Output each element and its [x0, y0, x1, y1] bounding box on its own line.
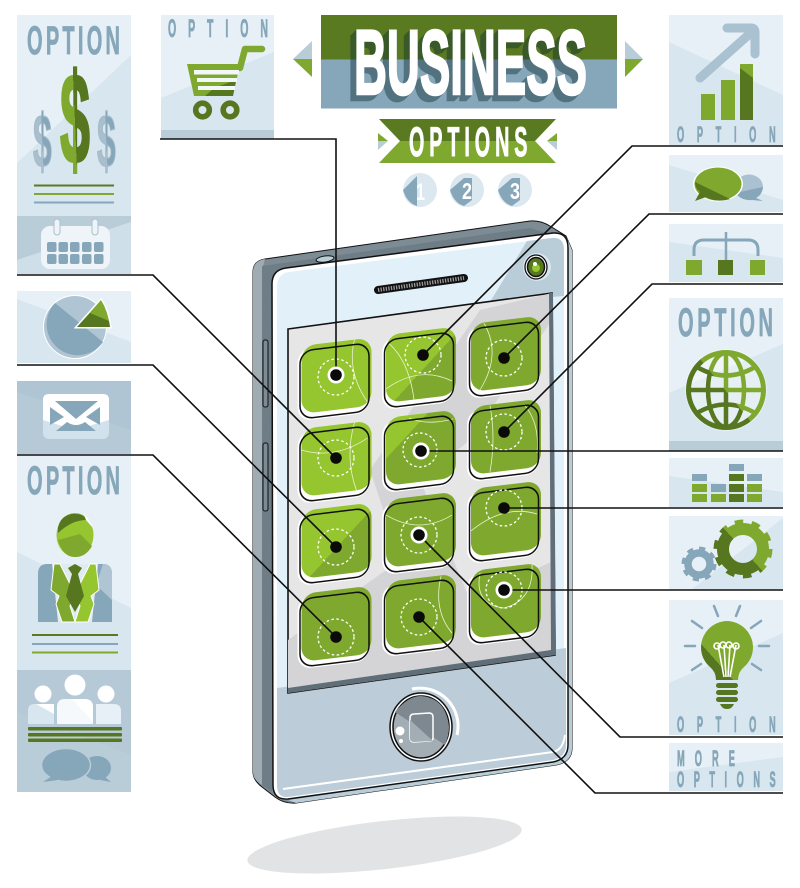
leader: hierarchy	[504, 284, 783, 432]
icon: equalizer	[692, 464, 762, 502]
panel: person	[17, 454, 131, 670]
camera	[523, 253, 551, 281]
subtitle: options ribbon: OPTIONS	[409, 118, 527, 165]
app tiles	[298, 316, 541, 669]
icon: light bulb	[685, 606, 769, 709]
icon: dollar signs: $	[97, 100, 116, 184]
leader lines	[17, 139, 783, 793]
tile dashed rings	[318, 337, 522, 655]
panel: idea bulb	[669, 600, 783, 737]
number 2: 2	[462, 178, 472, 204]
icon: speech bubbles	[693, 166, 763, 202]
icon: speech bubbles	[42, 748, 111, 782]
text lines	[32, 634, 118, 654]
leader: calendar	[17, 275, 336, 458]
screen	[288, 293, 556, 693]
tile row 3 col 1	[298, 503, 372, 586]
tile row 4 col 2	[382, 574, 456, 657]
icon: growth arrow and bars	[700, 28, 755, 120]
home button	[390, 688, 458, 761]
icon: org chart	[686, 232, 765, 275]
leader: chat	[504, 214, 783, 358]
step numbers	[403, 173, 532, 207]
icon: envelope	[43, 394, 109, 439]
leader: cart	[160, 139, 336, 375]
leader: mail	[17, 455, 336, 637]
leader: bulb	[419, 535, 783, 737]
label: option: OPTION	[677, 122, 776, 147]
speaker	[378, 278, 464, 290]
number 3: 3	[510, 178, 520, 204]
leader: more options	[419, 617, 783, 793]
icon: pie chart	[43, 295, 110, 359]
panel: globe	[669, 298, 783, 451]
arrow: left of title	[293, 41, 312, 77]
tile row 1 col 2	[382, 327, 456, 410]
label: option: OPTION	[168, 16, 268, 44]
panel: cart	[161, 15, 274, 139]
icon: shopping cart	[187, 49, 262, 117]
panel: money	[17, 15, 131, 216]
panel: gears	[669, 516, 783, 590]
subtitle: options ribbon	[378, 118, 557, 165]
leader: equalizer	[504, 507, 783, 509]
icon: calendar	[41, 219, 110, 269]
tile row 2 col 1	[298, 421, 372, 504]
arrow: right of title	[625, 41, 643, 77]
leader: globe	[421, 450, 783, 452]
tile row 3 col 3	[467, 481, 541, 564]
panel: chat	[669, 155, 783, 212]
panel: equalizer	[669, 458, 783, 507]
panel: mail	[17, 381, 131, 454]
icon: globe	[685, 349, 767, 431]
icon: team of people	[28, 674, 122, 742]
tile row 2 col 2	[382, 410, 456, 493]
title: business banner	[321, 12, 617, 114]
icon: gears	[684, 523, 769, 579]
panel: hierarchy	[669, 224, 783, 282]
ground shadow	[245, 806, 524, 884]
tile row 2 col 3	[467, 399, 541, 482]
leader: gears	[504, 589, 783, 591]
label: option: OPTION	[678, 299, 773, 345]
panel: calendar	[17, 216, 131, 274]
panel: growth chart	[669, 15, 783, 147]
text lines	[34, 184, 114, 204]
icon: dollar signs: $	[60, 47, 90, 190]
label: options: OPTIONS	[677, 767, 776, 792]
leader: growth chart	[423, 146, 783, 355]
icon: dollar signs: $	[33, 100, 52, 184]
panel: more options	[669, 743, 783, 792]
tile row 3 col 2	[382, 492, 456, 575]
label: option: OPTION	[27, 17, 120, 63]
label: option: OPTION	[27, 457, 120, 503]
phone front	[272, 233, 568, 799]
tile row 4 col 3	[467, 563, 541, 646]
label: option: OPTION	[677, 712, 776, 737]
phone	[253, 221, 572, 803]
connector dots	[328, 349, 512, 643]
panel: pie chart	[17, 291, 131, 363]
leader: pie chart	[17, 365, 336, 547]
phone back and side	[253, 221, 572, 803]
panel: team	[17, 670, 131, 792]
label: more: MORE	[677, 746, 735, 771]
number 1: 1	[416, 179, 425, 206]
tile row 1 col 3	[467, 316, 541, 399]
icon: businessman	[38, 513, 112, 622]
icon: dollar signs	[33, 47, 116, 190]
tile row 4 col 1	[298, 586, 372, 669]
tile row 1 col 1	[298, 338, 372, 421]
